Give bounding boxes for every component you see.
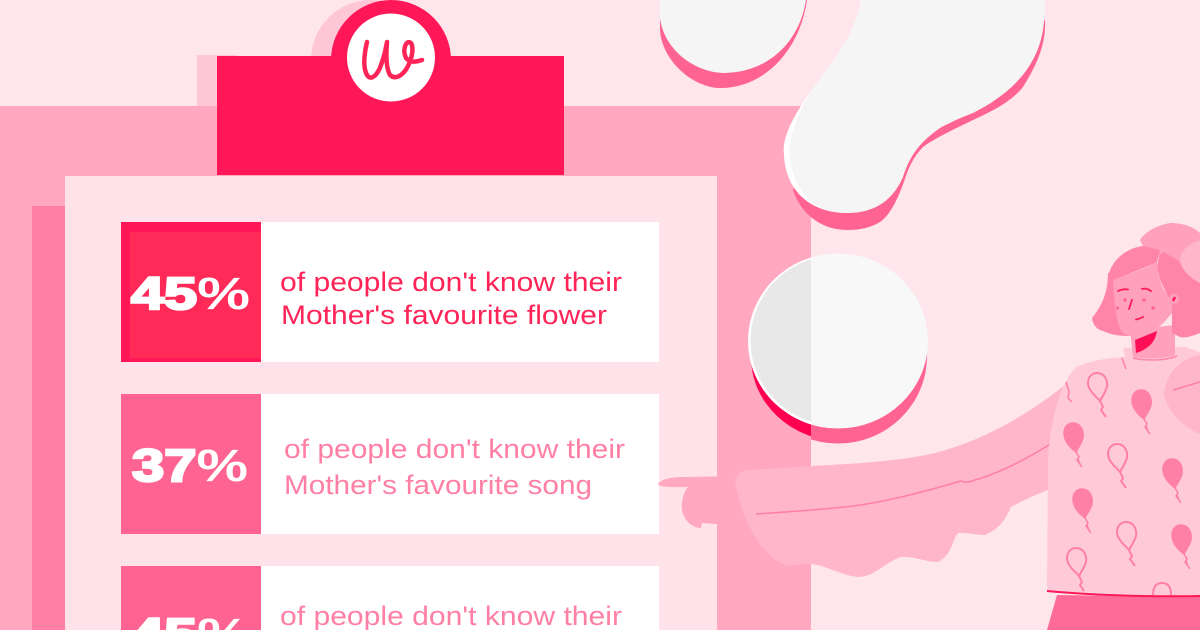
- panel: clipboard clip with logo: [217, 0, 564, 175]
- stat row: 37% song: of people don't know their: [284, 434, 625, 464]
- person: balloon pattern: [1064, 373, 1191, 595]
- collar shadow: [1135, 331, 1157, 353]
- thought bubble: small top blob: [660, 0, 807, 88]
- person: shirt: [1047, 347, 1200, 597]
- hair left bob: [1092, 270, 1130, 336]
- person: skirt: [1047, 595, 1200, 630]
- thought bubble: circle: [748, 254, 931, 444]
- hair right: [1157, 252, 1200, 337]
- stat row: 45% flower: Mother's favourite flower: [281, 300, 607, 330]
- stat row: 37% song: [121, 394, 659, 534]
- stat row: 37% song: Mother's favourite song: [284, 470, 592, 500]
- hair bun: [1140, 223, 1200, 262]
- neck: [1130, 325, 1175, 358]
- person: head: [1092, 223, 1200, 360]
- panel: clipboard sheet: [65, 176, 717, 630]
- face: [1113, 262, 1172, 336]
- facial features: [1118, 289, 1151, 320]
- stat row: 45% flower: 45 %: [131, 268, 250, 319]
- panel: clipboard backing: [0, 0, 811, 630]
- bun highlight: [1180, 240, 1200, 283]
- stat row: 45% flower: of people don't know their: [280, 267, 622, 297]
- icon: logo badge: [347, 14, 435, 102]
- stat row: 45% flower: [121, 222, 659, 362]
- thought bubble: large blob: [784, 0, 1045, 230]
- ear: [1169, 294, 1179, 304]
- stat row: 45% cropped: [121, 566, 659, 630]
- stat row: 37% song: 37 %: [132, 440, 248, 491]
- fringe: [1108, 246, 1160, 281]
- person: pointing hand: [658, 476, 755, 528]
- person: sleeve: [735, 385, 1070, 577]
